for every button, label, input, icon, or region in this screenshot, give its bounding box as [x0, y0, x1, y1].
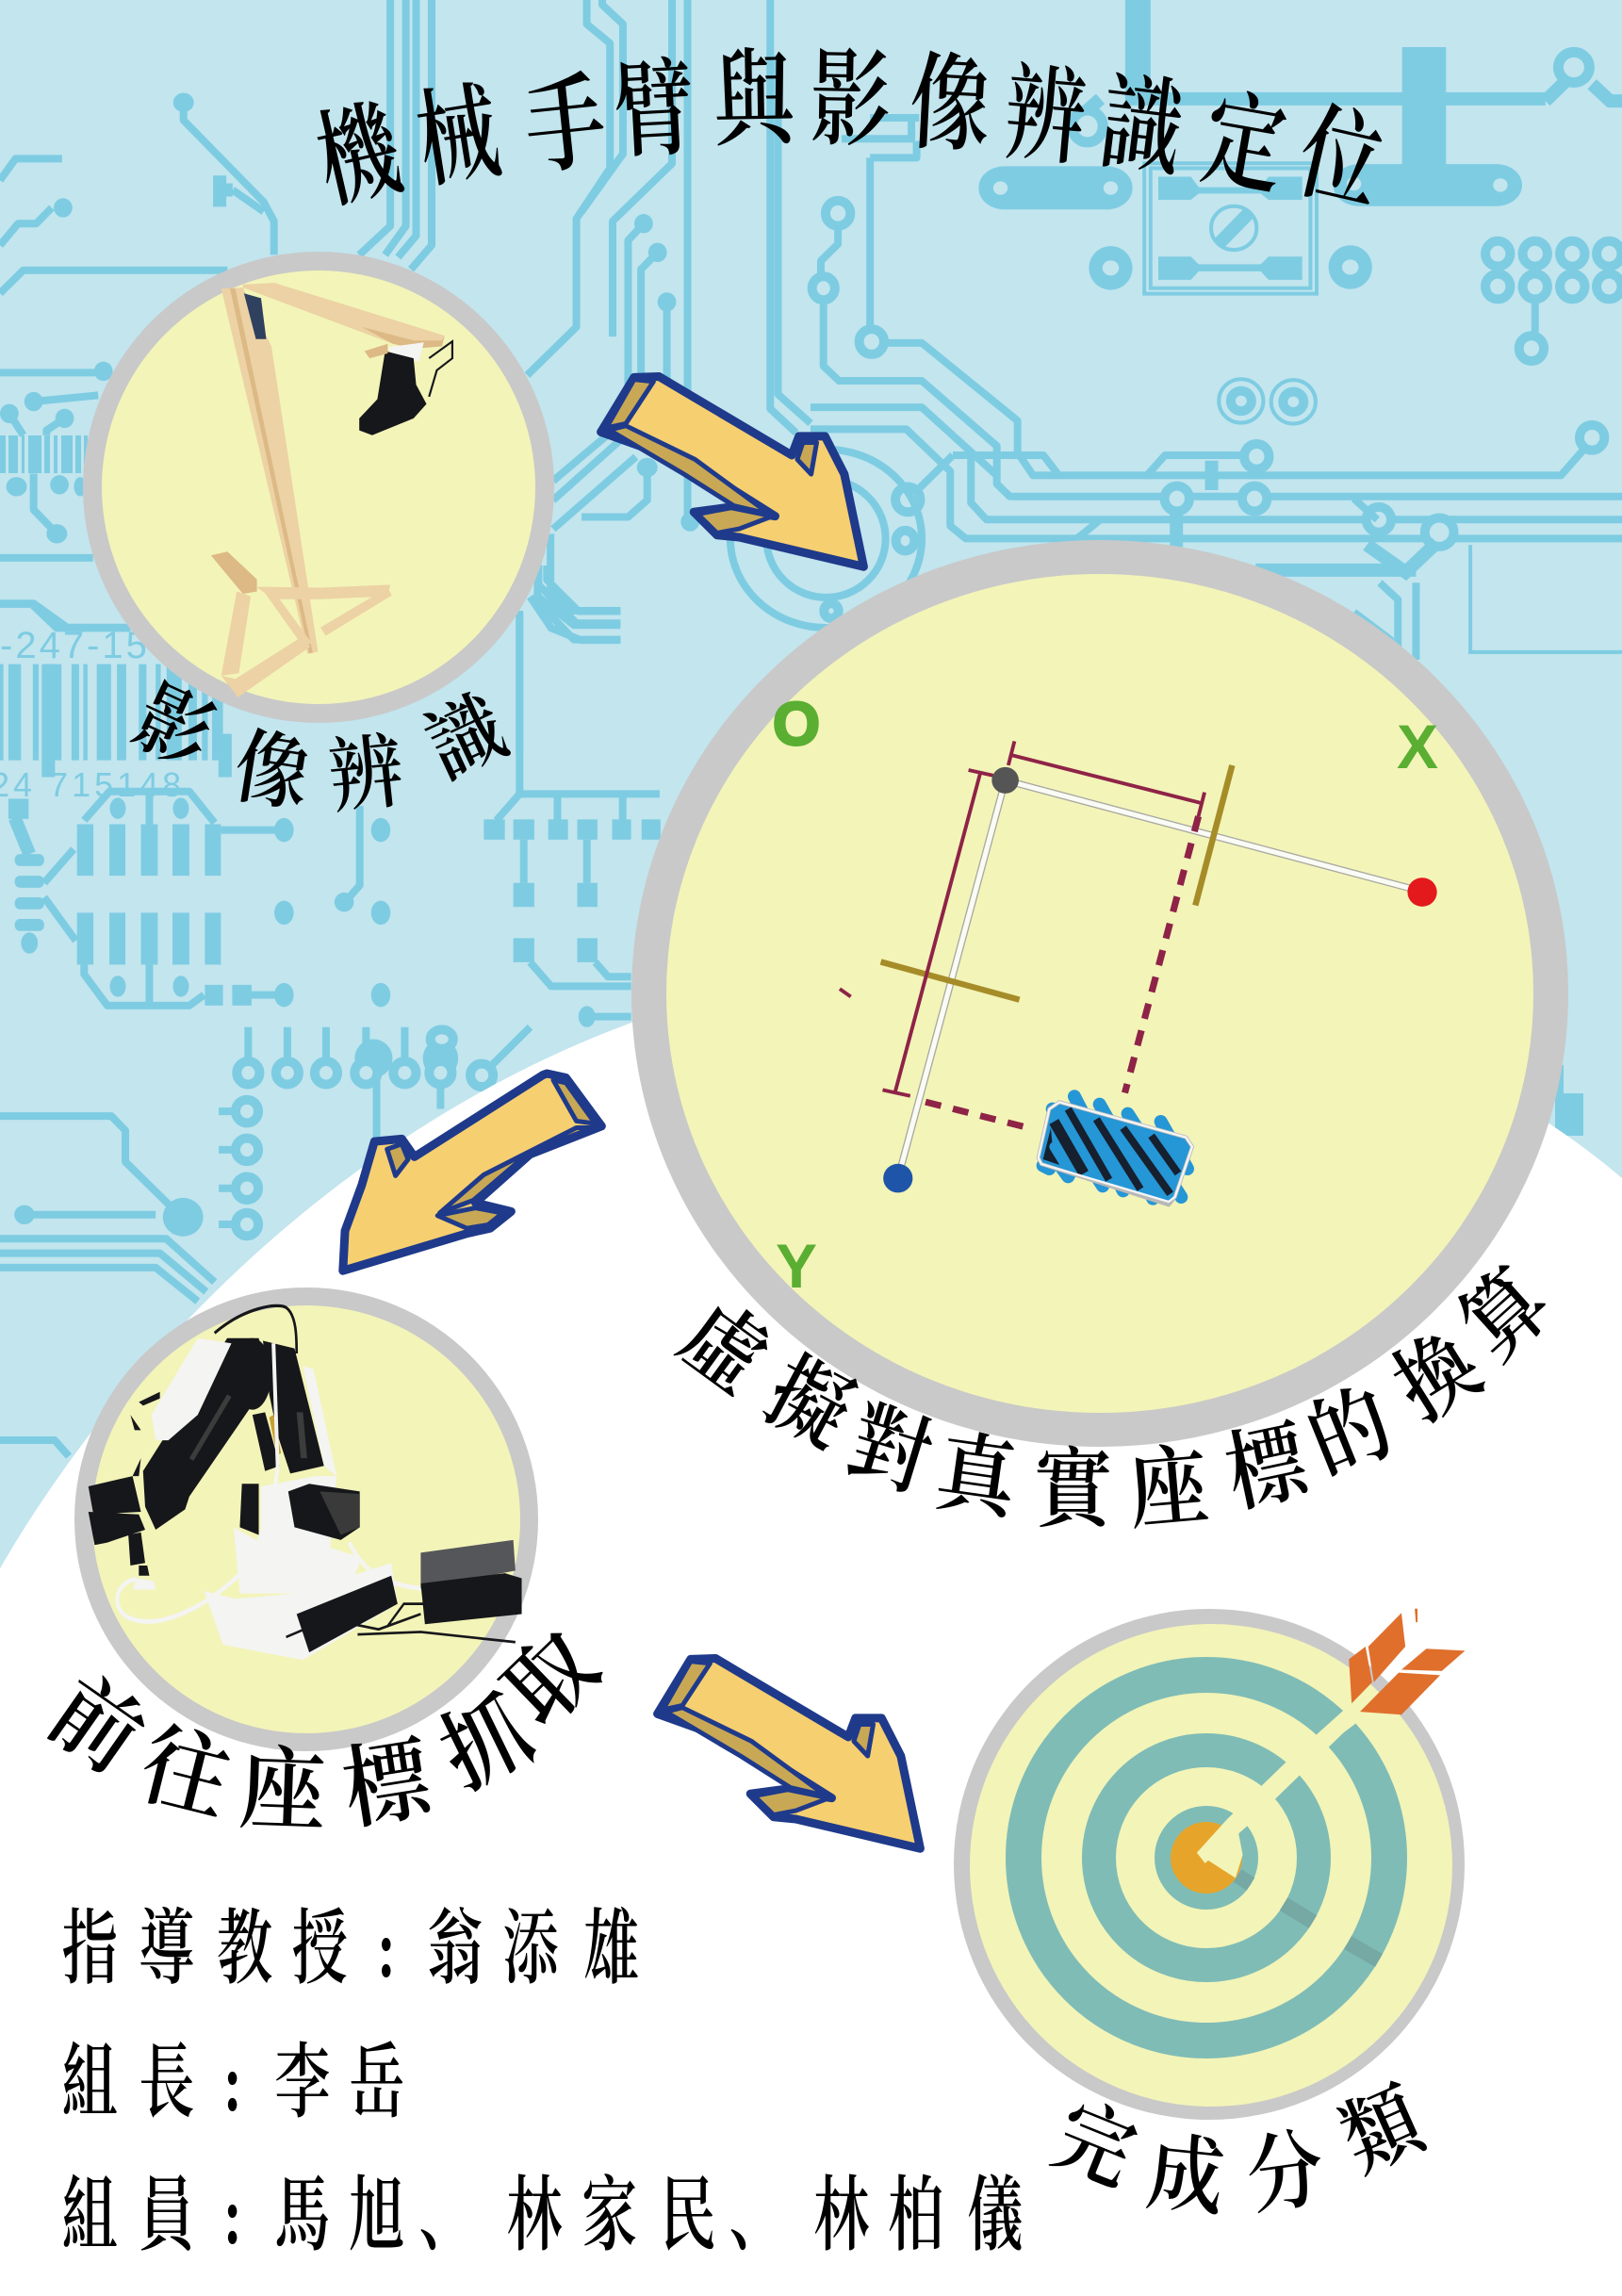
title: 像 — [907, 45, 993, 166]
white curved lower area — [0, 962, 1622, 2296]
heading: virtual to real coordinate conversion: 算 — [1445, 1253, 1568, 1377]
title — [307, 41, 1393, 225]
heading: virtual to real coordinate conversion: 座 — [1124, 1437, 1212, 1541]
credits: advisor and team members: 組長:李岳 — [62, 2039, 404, 2129]
credits: advisor and team members: 組員:馬旭、林家民、林柏儀 — [62, 2172, 1024, 2262]
heading: virtual to real coordinate conversion: 標 — [1218, 1413, 1319, 1525]
panel: robot arm circle — [74, 1287, 538, 1751]
chart: coordinate axes and dimension lines — [840, 741, 1437, 1192]
heading: classification complete: 成 — [1143, 2125, 1229, 2227]
panel: image recognition circle — [83, 252, 554, 723]
icon: wooden camera stand — [211, 283, 452, 697]
heading: classification complete: 完 — [1041, 2088, 1148, 2204]
heading: virtual to real coordinate conversion: 擬 — [751, 1343, 866, 1466]
heading: image recognition: 識 — [414, 681, 520, 795]
label: Y axis: Y — [776, 1231, 817, 1301]
heading: go to coordinates and grasp: 往 — [131, 1714, 239, 1833]
heading: go to coordinates and grasp — [31, 1614, 618, 1843]
title: 手 — [519, 64, 611, 189]
heading: virtual to real coordinate conversion — [663, 1253, 1568, 1541]
credits: advisor and team members — [62, 1905, 1024, 2262]
heading: classification complete: 類 — [1328, 2072, 1438, 2189]
title: 位 — [1288, 93, 1393, 225]
label: X axis: X — [1397, 712, 1438, 781]
heading: go to coordinates and grasp: 抓 — [426, 1681, 548, 1809]
heading: image recognition: 像 — [228, 721, 316, 823]
title: 械 — [410, 74, 507, 202]
heading: go to coordinates and grasp: 前 — [31, 1661, 159, 1793]
heading: image recognition: 辨 — [325, 726, 407, 824]
heading: go to coordinates and grasp: 座 — [238, 1740, 327, 1843]
icon: target rings — [1024, 1675, 1389, 2041]
panel: coordinate conversion circle — [631, 540, 1568, 1447]
label: O axis: O — [773, 690, 820, 758]
title: 識 — [1095, 65, 1190, 190]
icon: robot arm photo — [89, 1305, 522, 1660]
panel: target circle — [954, 1609, 1465, 2120]
title: 機 — [307, 90, 414, 222]
heading: classification complete — [1041, 2072, 1438, 2227]
title: 影 — [810, 42, 892, 160]
arrow: from conversion to grasp — [343, 1074, 601, 1271]
heading: go to coordinates and grasp: 取 — [486, 1614, 618, 1746]
arrow: from grasp to target — [658, 1658, 920, 1848]
background: circuit board pattern: -247-15 — [0, 625, 150, 666]
heading: classification complete: 分 — [1241, 2122, 1330, 2225]
title: 與 — [713, 41, 804, 160]
title: 定 — [1194, 81, 1294, 209]
arrow: from recognition to conversion — [601, 376, 863, 566]
heading: virtual to real coordinate conversion: 換 — [1380, 1316, 1498, 1440]
heading: virtual to real coordinate conversion: 的 — [1296, 1374, 1405, 1494]
heading: virtual to real coordinate conversion: 實 — [1034, 1442, 1118, 1539]
heading: virtual to real coordinate conversion: 對 — [838, 1393, 942, 1509]
heading: go to coordinates and grasp: 標 — [336, 1729, 440, 1842]
heading: image recognition — [121, 671, 520, 824]
title: 辨 — [1000, 56, 1090, 179]
heading: image recognition: 影 — [121, 671, 226, 784]
icon: arrow in target — [1197, 1609, 1465, 1878]
heading: virtual to real coordinate conversion: 真 — [930, 1424, 1028, 1533]
icon: striped detected object — [1039, 1096, 1192, 1205]
credits: advisor and team members: 指導教授:翁添雄 — [62, 1905, 639, 1995]
title: 臂 — [612, 51, 697, 172]
heading: virtual to real coordinate conversion: 虛 — [663, 1286, 784, 1411]
